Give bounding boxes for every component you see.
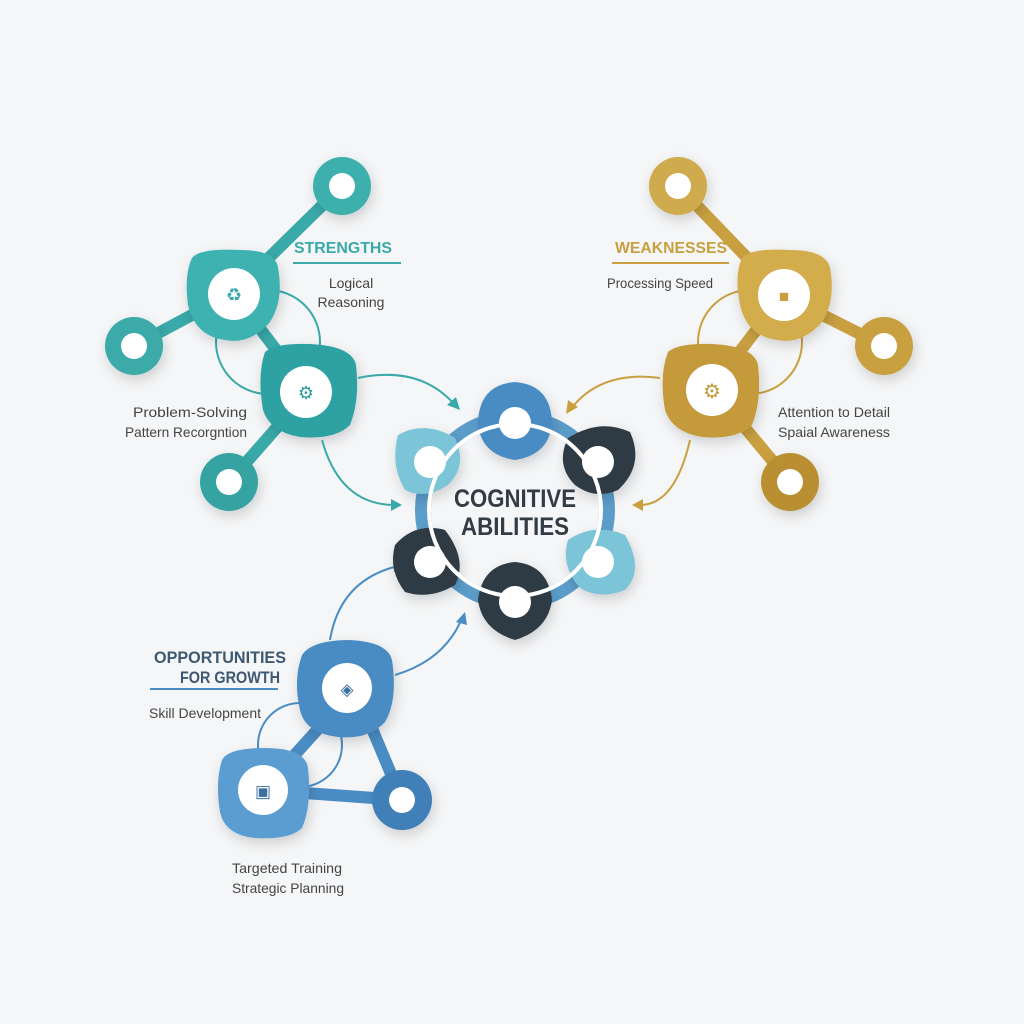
icon: logical reasoning blob: ♻ [226,285,242,305]
icon: weaknesses ring nodes [649,157,913,511]
panel: opportunities: Strategic Planning [232,880,344,896]
icon: strengths ring nodes [105,157,371,511]
chart: cognitive abilities hub [393,382,635,640]
panel: opportunities [149,640,432,896]
icon: targeted training blob [218,748,309,838]
heading: weaknesses: WEAKNESSES [615,240,727,257]
panel: weaknesses [607,157,913,511]
icon: processing speed blob: ■ [779,287,789,306]
icon: attention blob: ⚙ [703,381,721,403]
icon: logical reasoning blob [187,250,280,341]
icon: opportunity ring node [372,770,432,830]
panel: strengths: Reasoning [318,294,384,310]
icon: skill development blob: ◈ [340,680,354,699]
text: logical reasoning: Logical [329,275,373,291]
title: cognitive abilities: COGNITIVE [454,485,576,513]
text: attention: Attention to Detail [778,404,890,420]
icon: processing speed blob [737,250,832,341]
panel: strengths [105,157,401,511]
icon: problem-solving blob [260,344,357,438]
heading: strengths: STRENGTHS [294,240,392,257]
icon: targeted training blob: ▣ [255,782,271,801]
icon: skill development blob [297,640,394,737]
arrows [322,375,690,675]
panel: weaknesses: Spaial Awareness [778,424,890,440]
text: processing speed: Processing Speed [607,275,713,291]
text: skill development: Skill Development [149,705,261,721]
icon: attention blob [663,344,759,438]
icon: problem-solving blob: ⚙ [298,383,314,403]
text: problem solving: Problem-Solving [133,404,247,420]
panel: opportunities: FOR GROWTH [180,668,280,687]
heading: opportunities: OPPORTUNITIES [154,648,286,667]
panel: strengths: Pattern Recorgntion [125,424,247,440]
text: targeted training: Targeted Training [232,860,342,876]
chart: cognitive abilities hub: ABILITIES [461,513,569,541]
